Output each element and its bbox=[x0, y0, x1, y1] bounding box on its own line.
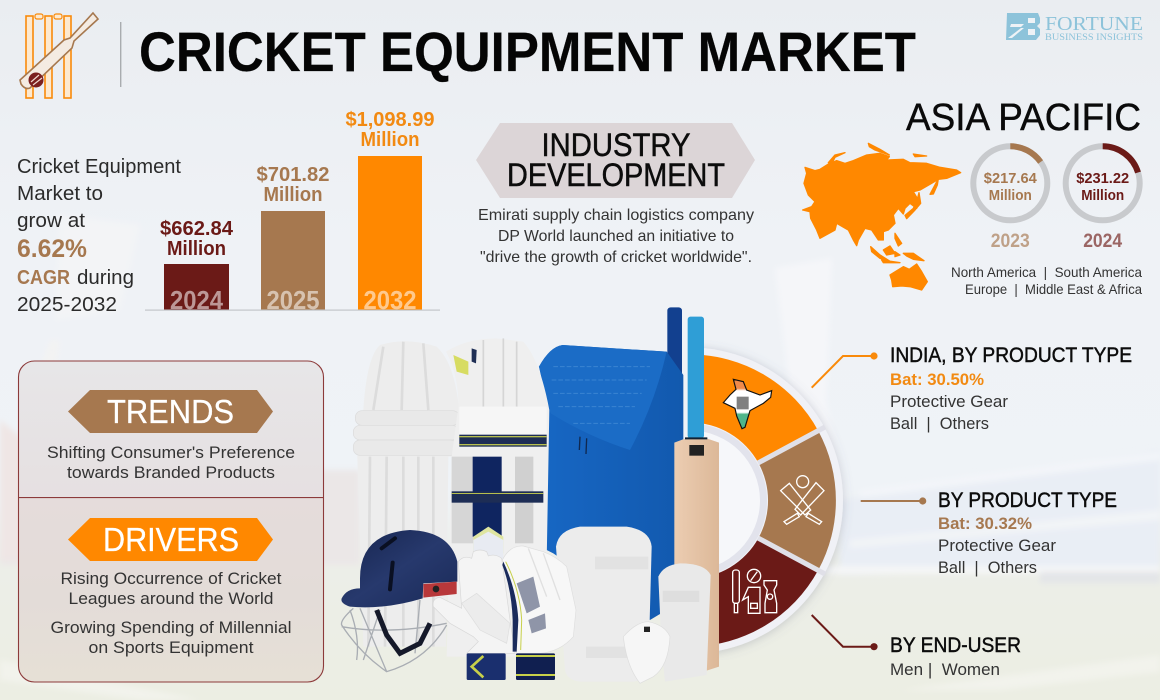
bar 2025 bbox=[256, 164, 330, 315]
drivers badge bbox=[68, 518, 273, 561]
connector: end-user bbox=[812, 615, 878, 650]
logo: Fortune Business Insights: FORTUNE bbox=[1045, 13, 1143, 35]
CAGR text block: 6.62% bbox=[17, 235, 87, 263]
title: CRICKET EQUIPMENT MARKET bbox=[139, 20, 916, 83]
text: by end-user: BY END-USER bbox=[890, 634, 1021, 657]
bar chart: market size bbox=[145, 109, 440, 315]
text: by end-user: Men | Women bbox=[890, 660, 1000, 679]
drivers text: on Sports Equipment bbox=[88, 638, 254, 657]
right batting pad bbox=[446, 338, 549, 657]
bar 2032: Million bbox=[360, 129, 420, 151]
CAGR text block: Cricket Equipment bbox=[17, 156, 181, 178]
bar 2024: $662.84 bbox=[160, 218, 234, 240]
arm guard bbox=[658, 563, 711, 682]
thigh guard bbox=[556, 527, 652, 682]
drivers text: Rising Occurrence of Cricket bbox=[60, 569, 282, 588]
text: India by product type: Bat: 30.50% bbox=[890, 370, 984, 389]
other regions bbox=[951, 264, 1142, 297]
text: by end-user bbox=[890, 634, 1021, 679]
panel: industry development: Emirati supply chain logistics company bbox=[478, 207, 754, 224]
text: by product type: Protective Gear bbox=[938, 536, 1056, 555]
maroon segment bbox=[719, 540, 817, 644]
helmet bbox=[341, 530, 457, 672]
cricket bat bbox=[674, 317, 719, 671]
bar 2032: $1,098.99 bbox=[346, 109, 434, 131]
bar 2025: $701.82 bbox=[256, 164, 330, 186]
CAGR text block: CAGR bbox=[17, 267, 70, 289]
other regions: North America | South America bbox=[951, 264, 1142, 280]
kit bag bbox=[539, 307, 683, 620]
connector: product type bbox=[861, 497, 926, 505]
text: by product type: BY PRODUCT TYPE bbox=[938, 489, 1117, 512]
panel: industry development: DP World launched an initiative to bbox=[498, 228, 734, 245]
bar 2024: Million bbox=[167, 238, 226, 260]
text: India by product type: INDIA, BY PRODUCT TYPE bbox=[890, 344, 1132, 367]
bar 2025: 2025 bbox=[266, 285, 320, 315]
logo: Fortune Business Insights bbox=[1006, 13, 1143, 42]
CAGR text block: 2025-2032 bbox=[17, 294, 117, 316]
trends text: towards Branded Products bbox=[67, 463, 275, 482]
drivers text: Leagues around the World bbox=[68, 589, 274, 608]
trends badge: TRENDS bbox=[107, 393, 234, 430]
CAGR text block: grow at bbox=[17, 210, 85, 232]
donut 2024 bbox=[1066, 146, 1140, 252]
logo: Fortune Business Insights: BUSINESS INSIGHTS bbox=[1045, 32, 1143, 42]
left batting pad bbox=[353, 341, 459, 647]
icon: India map bbox=[723, 379, 772, 429]
batting gloves bbox=[433, 546, 576, 680]
donut 2023: $217.64 bbox=[984, 170, 1037, 187]
bar 2032: 2032 bbox=[364, 285, 416, 315]
donut 2024: $231.22 bbox=[1076, 170, 1129, 187]
donut 2023: 2023 bbox=[991, 231, 1030, 252]
CAGR text block: during bbox=[77, 267, 134, 289]
panel: industry development: INDUSTRY bbox=[542, 127, 690, 163]
drivers text bbox=[50, 569, 292, 657]
drivers badge: DRIVERS bbox=[103, 521, 239, 558]
bar 2024 bbox=[160, 218, 234, 315]
trends text: Shifting Consumer's Preference bbox=[47, 443, 295, 462]
panel: industry development: DEVELOPMENT bbox=[507, 157, 725, 193]
segmented ring bbox=[704, 345, 847, 656]
donut 2023 bbox=[973, 146, 1047, 252]
bar 2025: Million bbox=[264, 184, 322, 206]
vertical divider bbox=[120, 22, 121, 87]
panel: industry development bbox=[476, 123, 755, 266]
text: India by product type bbox=[890, 344, 1132, 433]
text: India by product type: Protective Gear bbox=[890, 392, 1008, 411]
CAGR text block bbox=[17, 156, 181, 316]
donut 2024: Million bbox=[1081, 187, 1124, 204]
panel: Asia Pacific bbox=[803, 97, 1142, 297]
trends text bbox=[47, 443, 295, 482]
other regions: Europe | Middle East & Africa bbox=[965, 281, 1142, 297]
heading: ASIA PACIFIC bbox=[906, 97, 1141, 139]
trends badge bbox=[68, 390, 273, 433]
abdominal guard bbox=[623, 622, 670, 683]
text: by product type: Ball | Others bbox=[938, 558, 1037, 577]
text: by product type bbox=[938, 489, 1117, 577]
panel: industry development: "drive the growth of cricket worldwide". bbox=[480, 249, 752, 266]
icon: stumps, bat and ball bbox=[20, 13, 98, 98]
donut 2024: 2024 bbox=[1083, 231, 1123, 252]
icon: bat, ball, glove, trophy bbox=[733, 569, 777, 613]
panel: trends and drivers bbox=[18, 361, 324, 682]
bar 2024: 2024 bbox=[170, 285, 223, 315]
icon: crossed bats and ball bbox=[781, 476, 824, 524]
brown segment bbox=[759, 431, 836, 570]
equipment illustration bbox=[341, 307, 719, 683]
drivers text: Growing Spending of Millennial bbox=[50, 618, 292, 637]
connector: India bbox=[812, 352, 878, 388]
map: Asia Pacific bbox=[803, 143, 961, 290]
CAGR text block: Market to bbox=[17, 183, 103, 205]
bar 2032 bbox=[346, 109, 434, 315]
text: by product type: Bat: 30.32% bbox=[938, 514, 1032, 533]
text: India by product type: Ball | Others bbox=[890, 414, 989, 433]
orange segment bbox=[704, 355, 817, 461]
donut 2023: Million bbox=[989, 187, 1032, 204]
